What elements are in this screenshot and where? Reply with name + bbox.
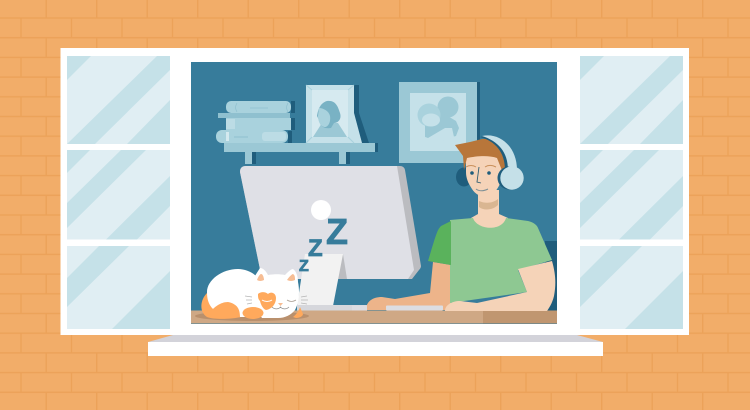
wall picture of a couple bbox=[399, 82, 480, 163]
keyboard bbox=[352, 306, 443, 310]
right window panes bbox=[580, 56, 683, 329]
desk bbox=[191, 310, 557, 324]
neck bbox=[471, 190, 508, 236]
whiskers bbox=[245, 296, 308, 304]
cat shadow bbox=[195, 311, 309, 321]
headphones bbox=[480, 135, 524, 190]
left arm bbox=[366, 262, 451, 310]
right arm bbox=[445, 261, 555, 311]
green t-shirt bbox=[428, 218, 552, 303]
head bbox=[253, 268, 299, 318]
sleeping z letters: Z bbox=[308, 235, 323, 262]
left window panes bbox=[67, 56, 170, 329]
power light bbox=[311, 200, 331, 220]
computer monitor bbox=[240, 166, 421, 311]
sleeping z letters: Z bbox=[299, 258, 309, 275]
framed photo bbox=[306, 85, 354, 143]
sleeping z letters: Z bbox=[326, 211, 348, 252]
face bbox=[466, 155, 503, 197]
orange paw at rear of head bbox=[293, 307, 303, 318]
sleeping z letters bbox=[299, 211, 348, 275]
shelf bbox=[224, 143, 378, 164]
window sill bbox=[148, 335, 603, 356]
window frame bbox=[60, 48, 689, 335]
leaning book bbox=[354, 85, 369, 143]
shelf with books and photo bbox=[216, 85, 378, 164]
front paw bbox=[242, 307, 264, 319]
left headphone cup bbox=[456, 168, 472, 186]
body bbox=[207, 269, 270, 317]
tail bbox=[201, 293, 241, 319]
hair bbox=[455, 139, 516, 173]
sleeping cat bbox=[195, 268, 309, 321]
man with headphones bbox=[352, 135, 555, 311]
stack of books bbox=[216, 101, 295, 143]
room interior bbox=[191, 62, 557, 324]
facial features bbox=[466, 166, 496, 191]
monitor stand bbox=[297, 254, 367, 311]
